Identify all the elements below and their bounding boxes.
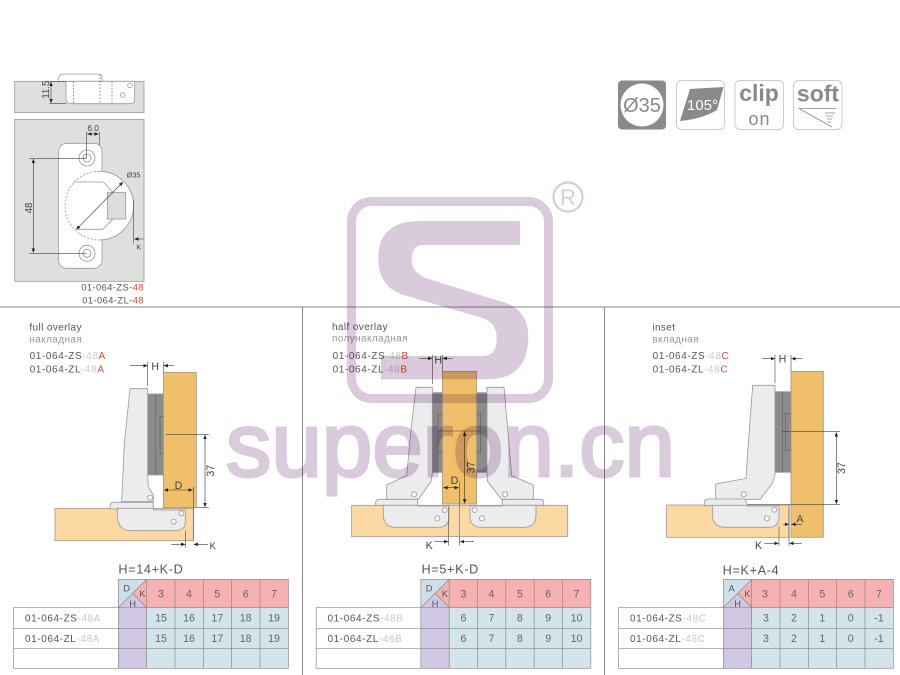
product codes: [30, 351, 106, 376]
dimension H: H: [779, 354, 786, 366]
table values: 8: [517, 613, 523, 625]
product codes: 01-064-ZL-48A: [30, 365, 105, 376]
table values: 7: [574, 588, 580, 600]
registered mark: R: [560, 185, 576, 210]
table grid: [14, 579, 288, 668]
table values: 5: [517, 588, 523, 600]
dimension 37: 37: [205, 465, 217, 477]
table values: 4: [791, 588, 797, 600]
table values: 5: [819, 588, 825, 600]
dimension K: K: [755, 540, 762, 552]
table values: -1: [874, 613, 884, 625]
heading: full overlay: [29, 323, 82, 346]
corner labels: K: [442, 589, 449, 599]
icon: clip on: clip: [739, 80, 779, 106]
front view drawing: K: [136, 242, 141, 251]
panel: inset: [652, 323, 848, 552]
dimension H: H: [434, 354, 442, 366]
table values: 19: [268, 633, 280, 645]
table values: 7: [876, 588, 882, 600]
table values: 3: [763, 633, 769, 645]
table values: 1: [819, 613, 825, 625]
panel: half overlay: [332, 322, 568, 552]
corner labels: [426, 584, 449, 609]
table values: 4: [489, 588, 495, 600]
table values: 9: [545, 633, 551, 645]
table values: 01-064-ZL-48C: [630, 634, 706, 645]
table values: 15: [155, 613, 167, 625]
front view drawing: Ø35: [127, 170, 141, 179]
table values: 01-064-ZS-48B: [327, 614, 404, 625]
icon: clip on: on: [748, 109, 771, 129]
heading: half overlay: half overlay: [332, 322, 388, 333]
corner labels: H: [129, 599, 136, 609]
heading: half overlay: [332, 322, 408, 345]
dimension D: D: [451, 475, 459, 487]
side view drawing: 11.5: [41, 81, 52, 99]
dimension 37: [748, 432, 848, 505]
side view drawing: [15, 74, 144, 113]
heading: inset: [652, 323, 699, 346]
table values: 6: [545, 588, 551, 600]
dimension H: [762, 354, 802, 383]
dimension K: K: [210, 541, 217, 551]
dimension A: A: [796, 513, 804, 525]
product codes: 01-064-ZS-48C: [653, 351, 729, 362]
table values: 6: [461, 613, 467, 625]
heading: half overlay: полунакладная: [332, 334, 408, 345]
heading: full overlay: full overlay: [29, 323, 82, 334]
icon: 105 degree angle: 105°: [687, 97, 718, 114]
corner labels: A: [729, 584, 736, 594]
table values: 17: [211, 633, 223, 645]
product codes: 01-064-ZS-48: [81, 282, 144, 292]
dimension H: H: [151, 361, 159, 373]
corner labels: H: [734, 599, 741, 609]
table values: 3: [763, 613, 769, 625]
table values: 15: [155, 633, 167, 645]
icon: soft close: [794, 80, 842, 130]
product codes: [333, 351, 409, 376]
heading: full overlay: накладная: [29, 335, 82, 346]
table values: [630, 588, 884, 645]
hinge drawing: [55, 372, 196, 541]
table values: 9: [545, 613, 551, 625]
formula: H=5+K-D: [421, 562, 479, 576]
table values: 5: [214, 588, 220, 600]
formula: H=14+K-D: [118, 562, 183, 576]
dimension 37: [438, 431, 481, 503]
product codes: [653, 351, 729, 376]
table values: 4: [186, 588, 192, 600]
table grid: [619, 579, 893, 668]
heading: inset: inset: [652, 323, 675, 334]
registered mark: [554, 182, 582, 212]
dimension 37: 37: [465, 461, 477, 473]
product codes: 01-064-ZL-48: [82, 295, 144, 305]
table values: 17: [211, 613, 223, 625]
table values: 3: [762, 588, 768, 600]
formula: H=K+A-4: [723, 563, 779, 577]
corner labels: K: [744, 589, 751, 599]
dimension A: [783, 513, 804, 525]
table values: 6: [243, 588, 249, 600]
table grid: [316, 579, 591, 668]
table values: 1: [819, 633, 825, 645]
product codes: 01-064-ZS-48A: [30, 351, 106, 362]
dimension 37: [166, 434, 217, 508]
dimension K: [171, 531, 217, 551]
front view drawing: 48: [24, 203, 35, 213]
section divider lines: [0, 307, 900, 675]
table values: 01-064-ZL-48B: [327, 634, 402, 645]
table values: 10: [571, 613, 582, 625]
corner labels: D: [426, 584, 433, 594]
panel: table full overlay: [14, 562, 288, 668]
table values: 10: [571, 633, 582, 645]
panel: table half overlay: [316, 562, 591, 668]
table values: 7: [271, 588, 277, 600]
watermark text: superon.cn: [226, 395, 675, 496]
table values: 6: [461, 633, 467, 645]
heading: inset: вкладная: [652, 335, 699, 346]
product codes: 01-064-ZL-48B: [333, 365, 408, 376]
table values: 6: [848, 588, 854, 600]
dimension K: [426, 507, 474, 552]
table values: 8: [517, 633, 523, 645]
panel: top-left technical drawing: [15, 74, 144, 305]
panel: full overlay: [29, 323, 217, 551]
table values: 18: [240, 633, 252, 645]
watermark logo: [226, 182, 675, 496]
table values: 7: [489, 613, 495, 625]
dimension D: [164, 480, 193, 541]
hinge drawing: [666, 371, 823, 537]
hinge drawing: [352, 371, 568, 537]
logo letter mark: [378, 221, 528, 379]
dimension K: [755, 505, 802, 552]
corner labels: H: [432, 599, 439, 609]
dimension 37: 37: [836, 462, 848, 474]
corner labels: [123, 584, 146, 609]
dimension D: [443, 475, 459, 546]
table values: 01-064-ZS-48C: [630, 614, 707, 625]
dimension K: K: [426, 540, 433, 552]
table values: [25, 588, 280, 645]
table values: 2: [791, 633, 797, 645]
table values: 01-064-ZL-48A: [25, 634, 100, 645]
table values: 19: [268, 613, 280, 625]
table values: [327, 588, 582, 645]
corner labels: [729, 584, 751, 609]
icon: diameter 35: [618, 80, 666, 130]
front view drawing: 6.0: [87, 123, 99, 133]
table values: 3: [461, 588, 467, 600]
table values: 3: [158, 588, 164, 600]
dimension D: D: [175, 480, 183, 492]
logo frame: [352, 202, 548, 398]
dimension H: [419, 354, 453, 384]
table values: 18: [240, 613, 252, 625]
panel: table inset: [619, 563, 893, 668]
front view drawing: [15, 119, 144, 281]
corner labels: K: [139, 589, 146, 599]
table values: 0: [848, 633, 854, 645]
icon: clip on: [735, 80, 784, 130]
product codes: 01-064-ZS-48B: [333, 351, 409, 362]
dimension H: [130, 361, 174, 386]
icon: 105 degree angle: [676, 80, 724, 130]
table values: 16: [183, 613, 195, 625]
icon: soft close: soft: [797, 80, 839, 106]
table values: 16: [183, 633, 195, 645]
table values: 2: [791, 613, 797, 625]
corner labels: D: [123, 584, 130, 594]
table values: -1: [874, 633, 884, 645]
icon: diameter 35: Ø35: [623, 95, 661, 117]
table values: 0: [848, 613, 854, 625]
product codes: [81, 282, 144, 305]
table values: 7: [489, 633, 495, 645]
product codes: 01-064-ZL-48C: [653, 365, 728, 376]
table values: 01-064-ZS-48A: [25, 614, 101, 625]
